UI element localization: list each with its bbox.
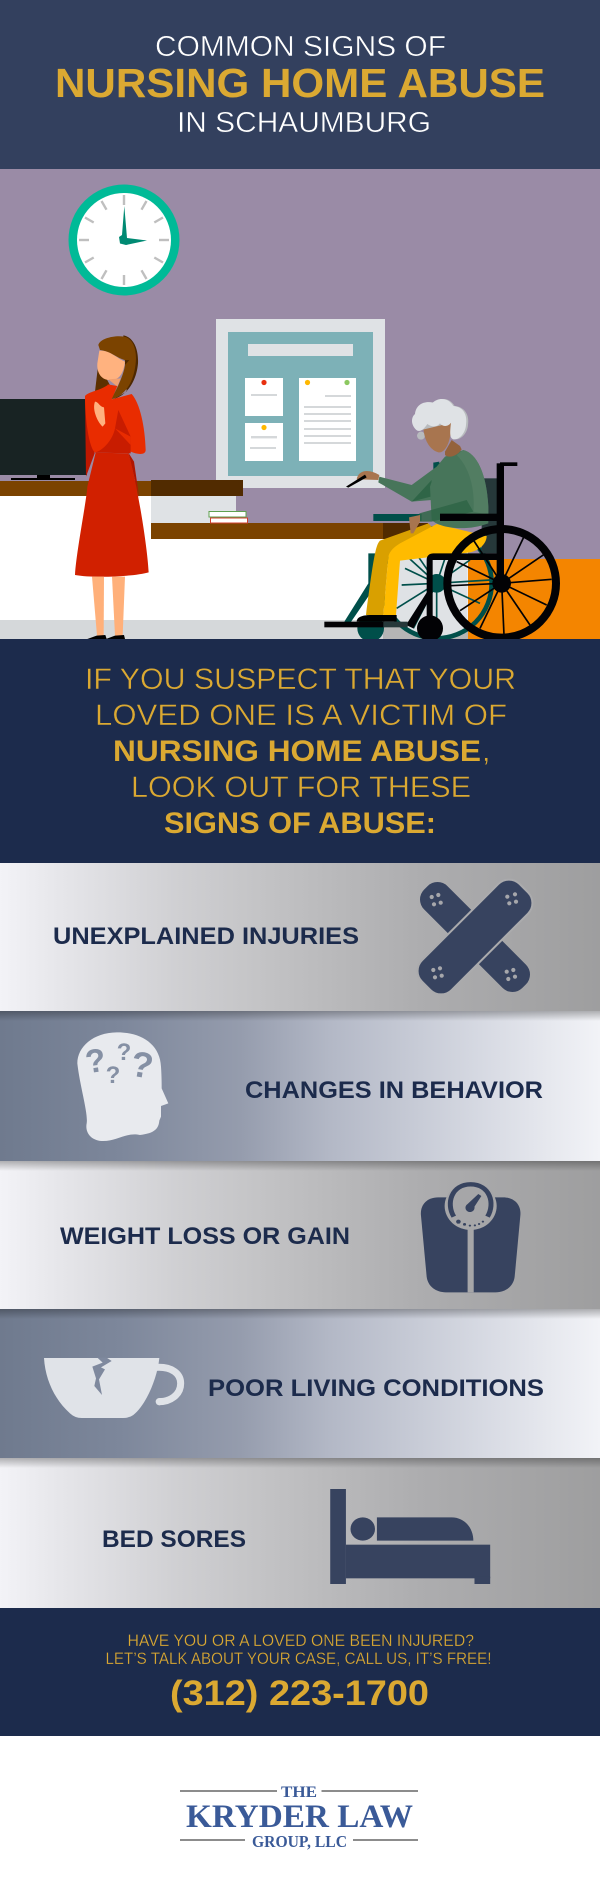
intro line 4: LOOK OUT FOR THESE — [131, 771, 471, 804]
intro line 1: IF YOU SUSPECT THAT YOUR — [85, 663, 516, 696]
icon: head with question marks: ? — [128, 1043, 157, 1087]
panel: call to action — [0, 1608, 600, 1736]
panel: weight loss or gain — [0, 1161, 600, 1309]
wheelchair frame — [324, 462, 517, 641]
wall and floor — [0, 496, 600, 639]
shelves and desk — [0, 480, 428, 539]
phone number: (312) 223-1700 — [170, 1674, 429, 1713]
label: BED SORES — [102, 1526, 246, 1553]
logo: the kryder law group: THE — [281, 1784, 317, 1801]
panel: bed sores — [0, 1458, 600, 1608]
title line: common signs of: COMMON SIGNS OF — [155, 31, 446, 63]
icon: head with question marks: ? — [117, 1039, 131, 1066]
television — [0, 399, 87, 480]
label: POOR LIVING CONDITIONS — [208, 1375, 544, 1402]
label: CHANGES IN BEHAVIOR — [245, 1077, 543, 1104]
head and hair — [412, 399, 468, 457]
legs — [357, 523, 487, 622]
title line: nursing home abuse: NURSING HOME ABUSE — [55, 60, 545, 106]
figure: elderly person in wheelchair — [324, 399, 556, 642]
figure: woman in red dress — [75, 335, 149, 639]
stack of books — [209, 512, 248, 523]
label: WEIGHT LOSS OR GAIN — [60, 1223, 350, 1250]
header panel — [0, 0, 600, 169]
icon: bathroom scale — [421, 1182, 520, 1292]
intro line 3: , — [482, 735, 490, 768]
icon: head with question marks: ? — [83, 1041, 108, 1080]
torso and arms — [346, 450, 488, 533]
icon: wall clock — [68, 184, 180, 296]
icon: head with question marks — [77, 1032, 168, 1141]
intro line 2: LOVED ONE IS A VICTIM OF — [95, 699, 507, 732]
illustration: nursing home room — [0, 169, 600, 642]
label: UNEXPLAINED INJURIES — [53, 923, 359, 950]
call to action line 2: LET’S TALK ABOUT YOUR CASE, CALL US, IT’S FREE! — [106, 1649, 492, 1668]
icon: cracked cup — [44, 1358, 181, 1418]
teal armrest and frame — [344, 463, 440, 623]
panel: poor living conditions — [0, 1309, 600, 1458]
front wheel — [447, 529, 556, 638]
title line: in schaumburg: IN SCHAUMBURG — [177, 107, 431, 139]
intro line 3: NURSING HOME ABUSE — [113, 735, 481, 768]
intro line 5: SIGNS OF ABUSE: — [164, 807, 436, 840]
icon: head with question marks: ? — [106, 1062, 120, 1089]
notice board — [216, 319, 385, 488]
logo: the kryder law group: KRYDER LAW — [186, 1799, 413, 1835]
call to action line 1: HAVE YOU OR A LOVED ONE BEEN INJURED? — [128, 1631, 474, 1650]
icon: crossed bandages — [411, 873, 539, 1001]
logo: the kryder law group — [180, 1784, 418, 1851]
rear wheel — [357, 528, 492, 642]
logo: the kryder law group: GROUP, LLC — [252, 1832, 347, 1851]
panel: intro statement — [0, 639, 600, 863]
icon: person in bed — [330, 1489, 490, 1584]
panel: changes in behavior — [0, 1011, 600, 1161]
seat back — [482, 478, 498, 553]
panel: unexplained injuries — [0, 863, 600, 1011]
